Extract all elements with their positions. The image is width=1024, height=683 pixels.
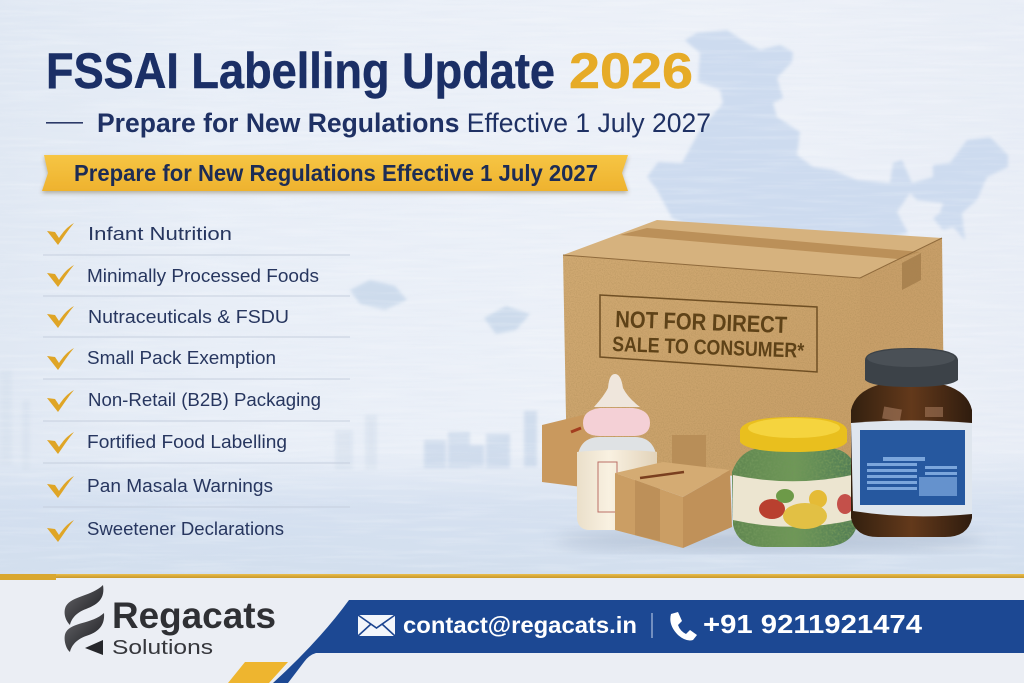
gold divider <box>0 574 1024 580</box>
item: Fortified Food Labelling: Fortified Food Labelling <box>87 431 287 452</box>
icon: phone <box>670 612 697 640</box>
item: Nutraceuticals & FSDU: Nutraceuticals & FSDU <box>88 306 289 327</box>
item: Infant Nutrition <box>47 223 232 245</box>
item: Small Pack Exemption: Small Pack Exemption <box>87 347 276 368</box>
small box front <box>615 462 732 548</box>
baby bottle <box>577 374 657 530</box>
brown bottle <box>851 348 972 537</box>
map of India <box>647 30 1008 240</box>
green jar <box>732 417 857 547</box>
ribbon banner <box>42 155 628 191</box>
logo text: Solutions <box>112 637 213 659</box>
item: Non-Retail (B2B) Packaging: Non-Retail (B2B) Packaging <box>88 389 321 410</box>
box stamp <box>600 295 817 372</box>
email: contact@regacats.in <box>403 612 637 638</box>
icon: envelope <box>358 615 395 636</box>
checklist <box>43 223 350 542</box>
item: Pan Masala Warnings: Pan Masala Warnings <box>87 475 273 496</box>
product group <box>542 220 985 552</box>
gold accent <box>228 662 288 683</box>
box stamp: NOT FOR DIRECT <box>615 306 788 338</box>
logo text <box>112 595 276 659</box>
skyline <box>424 411 537 468</box>
phone number: +91 9211921474 <box>703 609 923 639</box>
title: FSSAI Labelling Update <box>46 43 555 99</box>
subtitle: Prepare for New Regulations Effective 1 July 2027 <box>97 108 711 138</box>
contact band <box>273 600 1024 683</box>
item: Sweetener Declarations: Sweetener Declarations <box>87 518 284 539</box>
footer <box>0 574 1024 683</box>
item: Minimally Processed Foods: Minimally Processed Foods <box>87 265 319 286</box>
logo mark <box>65 585 104 655</box>
logo text: Regacats <box>112 595 276 636</box>
box stamp: SALE TO CONSUMER* <box>612 333 805 363</box>
title: 2026 <box>569 43 693 99</box>
item: Infant Nutrition: Infant Nutrition <box>88 223 232 244</box>
small box left <box>542 415 590 488</box>
ribbon banner: Prepare for New Regulations Effective 1 July 2027 <box>74 160 598 186</box>
large cardboard box <box>563 220 944 480</box>
